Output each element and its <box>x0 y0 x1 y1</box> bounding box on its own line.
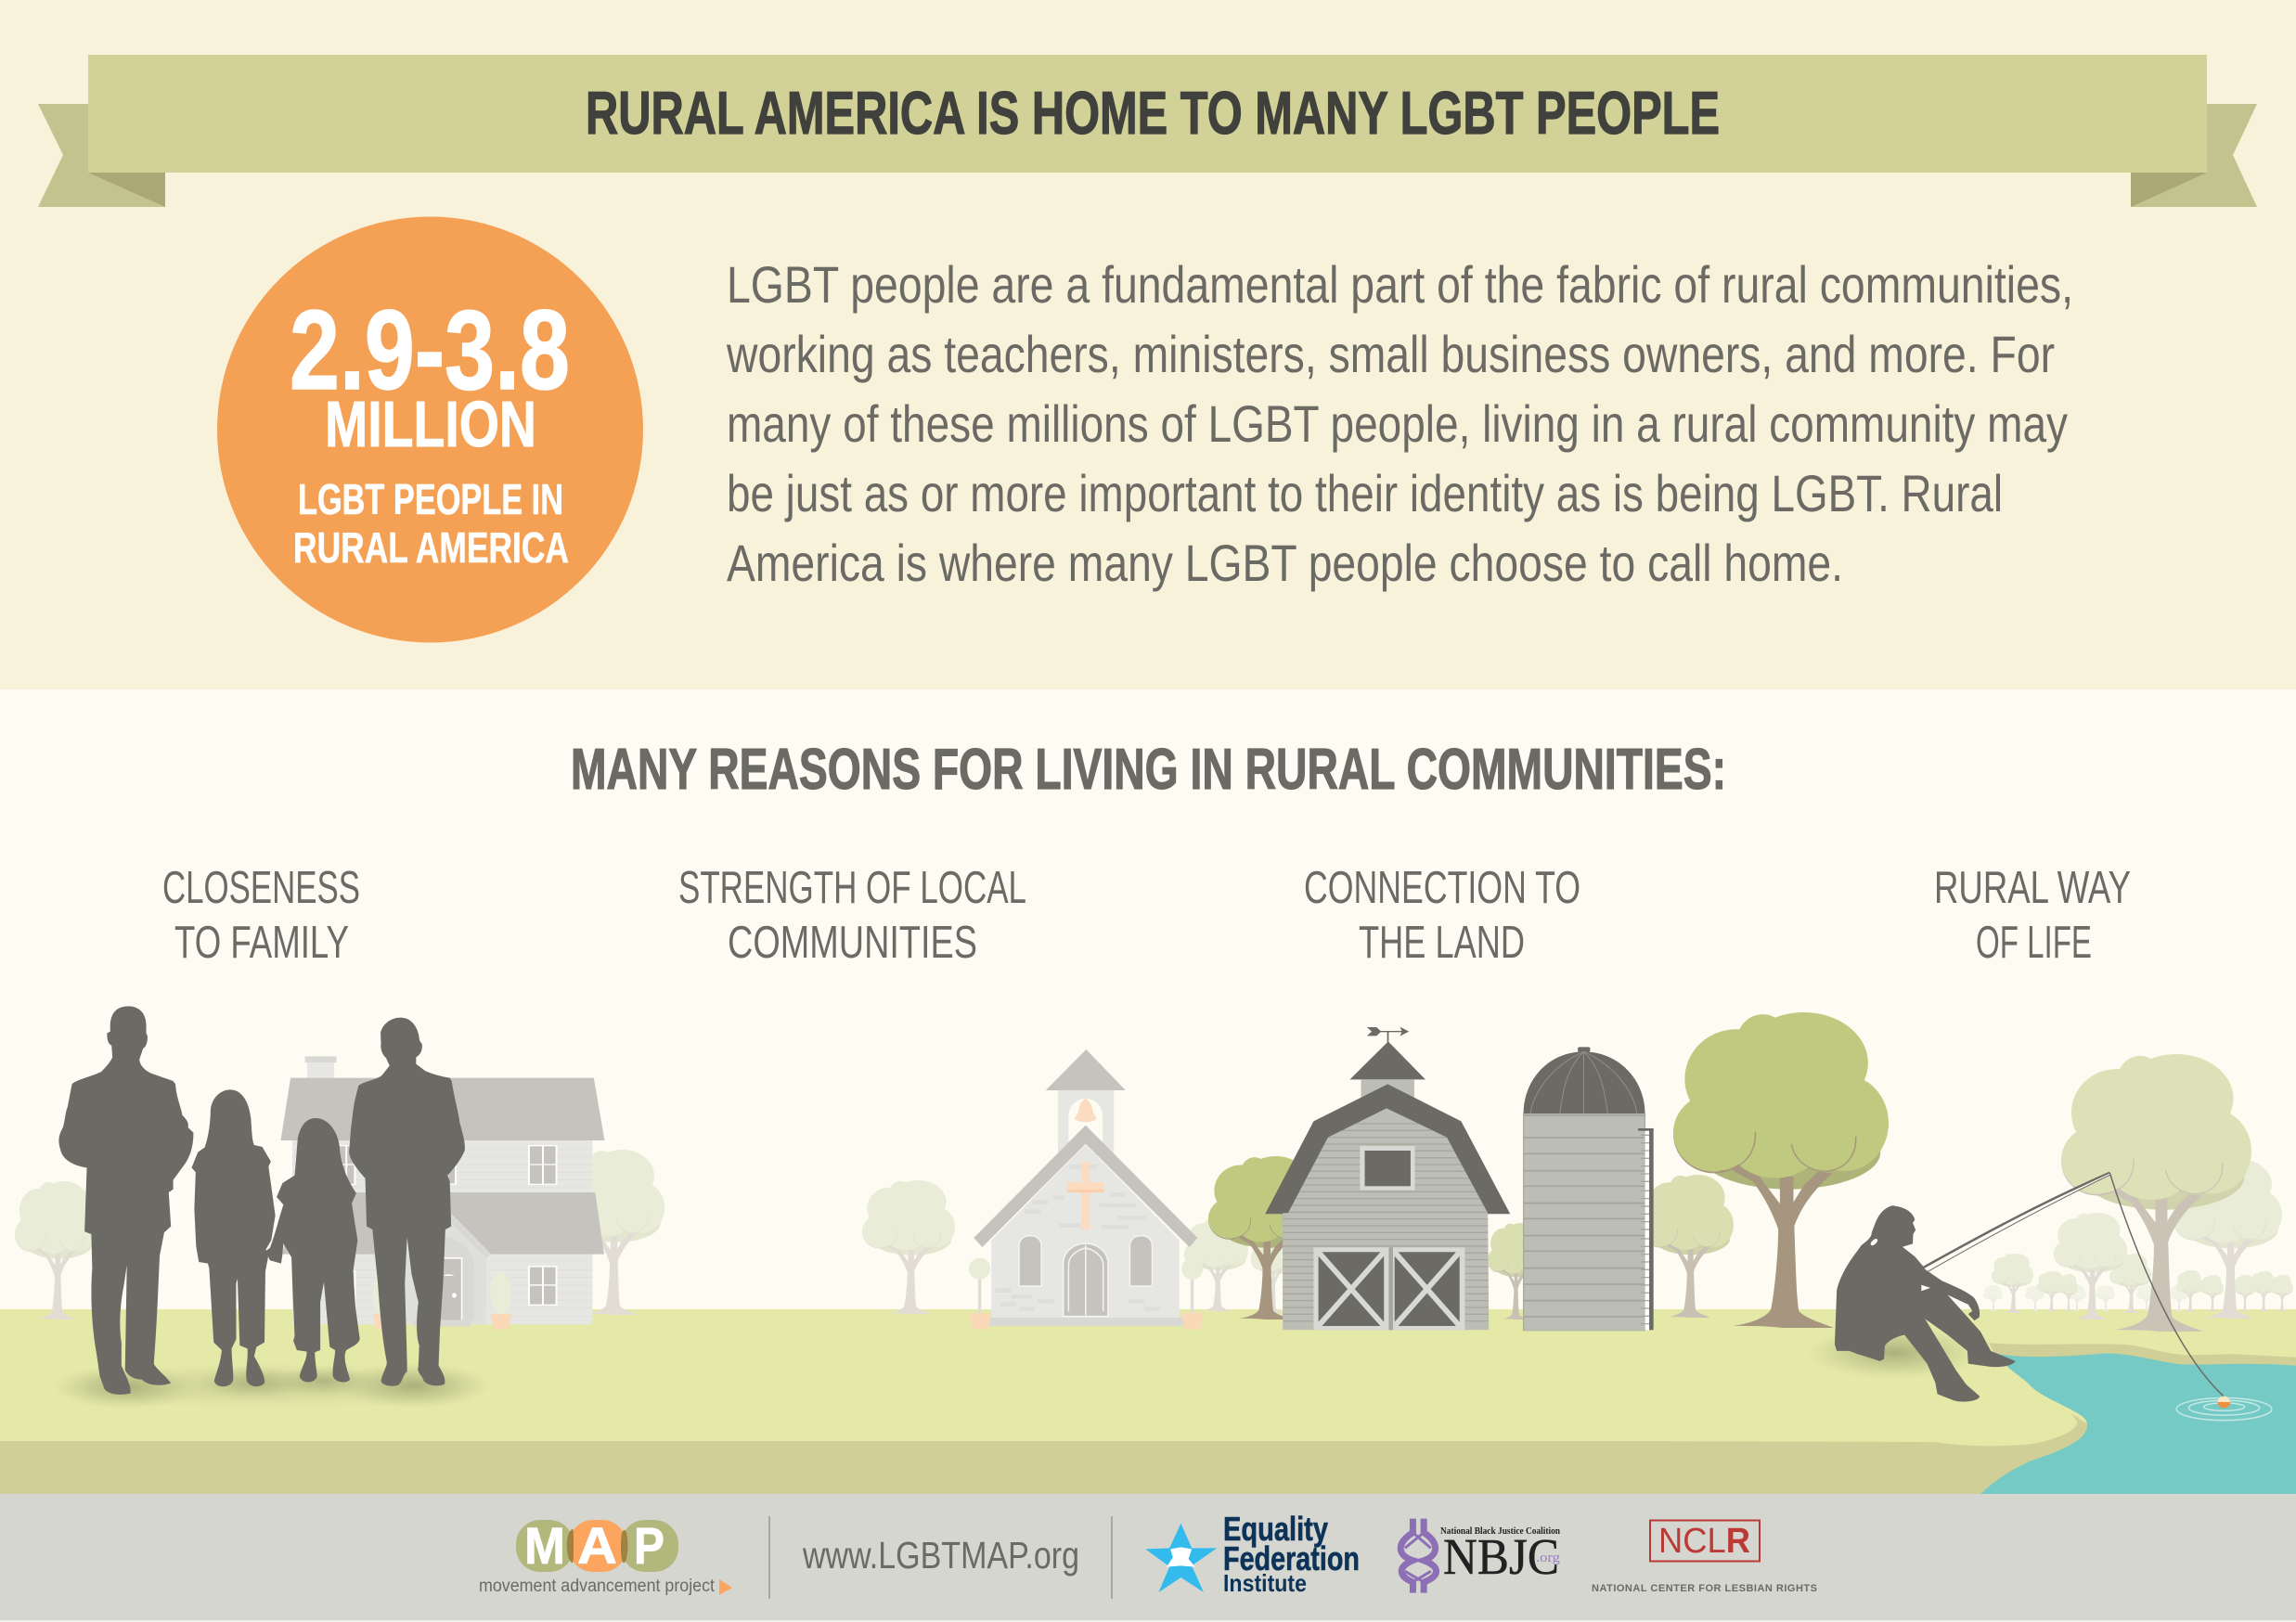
reason label: family: TO FAMILY <box>174 918 349 968</box>
footer band <box>0 1494 2296 1622</box>
logo: MAP: M <box>524 1516 565 1575</box>
icon: bell <box>1075 1099 1096 1122</box>
planter right <box>1181 1258 1204 1330</box>
person fishing <box>1806 1173 2230 1408</box>
fishing line <box>2109 1173 2224 1397</box>
church <box>969 1049 1204 1330</box>
intro paragraph <box>726 255 2073 592</box>
reason label: way of life: OF LIFE <box>1976 918 2092 968</box>
footer divider left <box>768 1516 770 1599</box>
statistic caption <box>293 475 569 572</box>
NCLR full name: NATIONAL CENTER FOR LESBIAN RIGHTS <box>1592 1583 1817 1594</box>
person: second parent <box>349 1018 465 1386</box>
icon: cross <box>1067 1162 1103 1229</box>
statistic number: 2.9-3.8 <box>290 287 570 413</box>
reason label: communities <box>678 863 1026 968</box>
icon: blue star <box>1145 1524 1217 1592</box>
title: RURAL AMERICA IS HOME TO MANY LGBT PEOPLE <box>586 79 1720 147</box>
logo: NBJC <box>1400 1519 1560 1593</box>
logo: Equality Federation Institute <box>1145 1510 1360 1597</box>
logo: Equality Federation Institute: Federation <box>1223 1539 1360 1577</box>
barn doors <box>1313 1247 1464 1330</box>
intro paragraph: America is where many LGBT people choose to call home. <box>727 534 1843 592</box>
icon: weather vane <box>1367 1027 1409 1042</box>
title ribbon <box>38 55 2257 207</box>
logo: NCLR: NCLR <box>1658 1522 1750 1561</box>
barn <box>1265 1027 1510 1330</box>
icon: orange arrow <box>719 1579 732 1595</box>
logo: Equality Federation Institute: Equality <box>1223 1510 1328 1548</box>
statistic caption: LGBT PEOPLE IN <box>298 475 563 523</box>
intro paragraph: be just as or more important to their identity as is being LGBT. Rural <box>727 464 2003 522</box>
logo: MAP: A <box>577 1516 617 1575</box>
logo: NBJC: National Black Justice Coalition <box>1440 1525 1560 1537</box>
MAP tagline: movement advancement project <box>479 1577 716 1596</box>
tree: fishing tree <box>2061 1054 2251 1332</box>
reason label: family: CLOSENESS <box>162 863 360 913</box>
background: top section <box>0 0 2296 689</box>
background: lower section <box>0 689 2296 1497</box>
logo: Equality Federation Institute: Institute <box>1223 1569 1307 1597</box>
family shadow <box>45 1362 495 1410</box>
reason label: communities: COMMUNITIES <box>728 918 977 968</box>
house <box>280 1056 604 1330</box>
website: www.LGBTMAP.org <box>802 1534 1079 1577</box>
logo: NBJC: NBJC <box>1443 1528 1559 1585</box>
logo: MAP <box>479 1516 732 1596</box>
pond and bank <box>1652 1343 2296 1494</box>
silo ladder <box>1638 1128 1654 1330</box>
logo: NBJC org suffix: .org <box>1536 1551 1561 1565</box>
planter left <box>969 1258 991 1330</box>
bobber <box>2217 1397 2230 1408</box>
barn loft window <box>1360 1146 1415 1191</box>
logo: NCLR <box>1592 1520 1817 1594</box>
reason label: land: CONNECTION TO <box>1304 863 1580 913</box>
reason label: land <box>1304 863 1580 968</box>
person: younger child <box>265 1118 360 1383</box>
reason label: family <box>162 863 360 968</box>
tree: large green <box>1673 1012 1889 1328</box>
section heading: MANY REASONS FOR LIVING IN RURAL COMMUNITIES: <box>571 738 1726 802</box>
reason label: land: THE LAND <box>1359 918 1525 968</box>
background trees <box>15 1150 2293 1319</box>
intro paragraph: working as teachers, ministers, small business owners, and more. For <box>726 325 2055 383</box>
reason label: way of life: RURAL WAY <box>1934 863 2131 913</box>
statistic circle <box>217 217 643 642</box>
fishing rod <box>1923 1173 2109 1271</box>
ground <box>0 1309 2296 1494</box>
statistic caption: RURAL AMERICA <box>293 523 569 572</box>
silo <box>1524 1047 1654 1331</box>
reason label: way of life <box>1934 863 2131 968</box>
reason label: communities: STRENGTH OF LOCAL <box>678 863 1026 913</box>
fisher shadow <box>1806 1325 1982 1380</box>
water ripples <box>2176 1398 2272 1421</box>
person: older child <box>191 1089 276 1386</box>
church windows and door <box>1019 1236 1153 1317</box>
logo: MAP: P <box>634 1516 664 1575</box>
footer divider right <box>1111 1516 1113 1599</box>
family silhouette <box>58 1006 465 1395</box>
statistic unit: MILLION <box>325 388 536 460</box>
person: father <box>58 1006 193 1395</box>
icon: knot <box>1400 1519 1437 1593</box>
fisher silhouette <box>1835 1205 2016 1402</box>
